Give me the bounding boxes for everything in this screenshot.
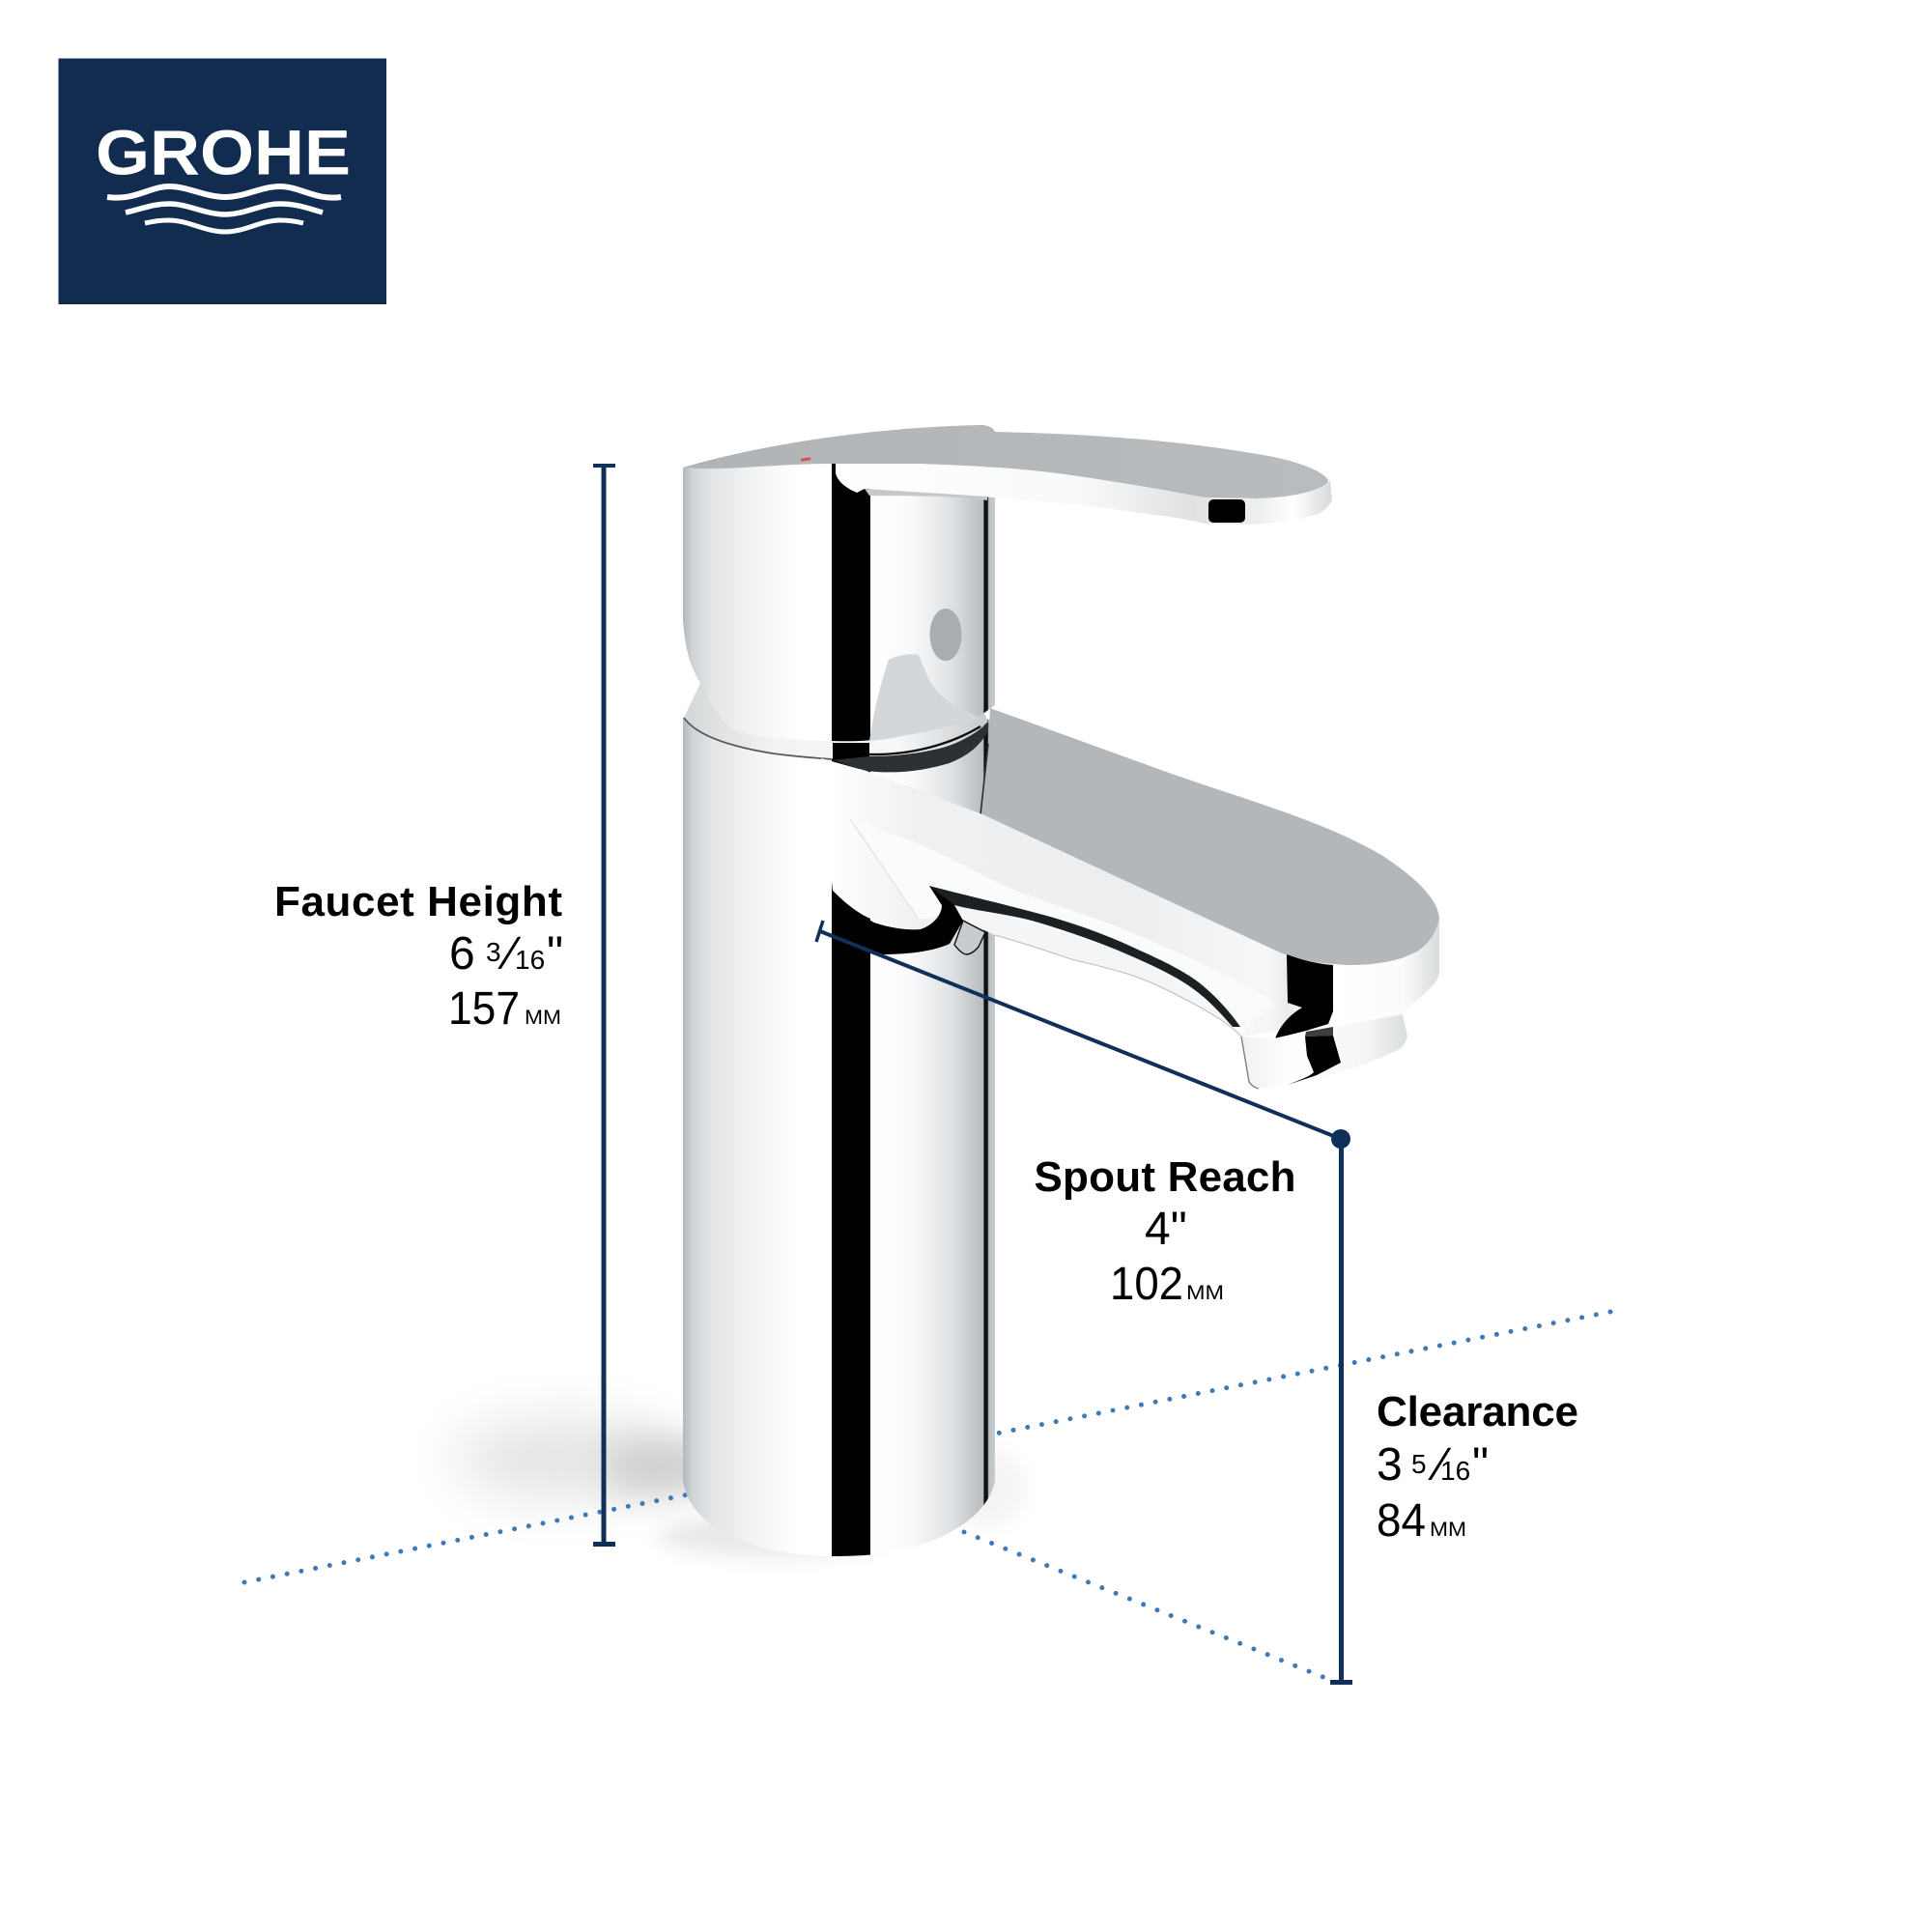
spout reach millimetres: MM [1186, 1282, 1224, 1304]
nozzle [1241, 1014, 1407, 1089]
clearance inches: ⁄ [1428, 1439, 1452, 1491]
clearance inches: 3 [1377, 1439, 1403, 1491]
dotted floor line: front [964, 1532, 1340, 1684]
floor shadow [454, 1416, 1024, 1557]
collar ring [684, 683, 988, 772]
dotted floor line: right [996, 1312, 1610, 1434]
logo: GROHE [58, 58, 386, 304]
faucet height inches: 16 [515, 945, 545, 975]
spout facet edge [850, 819, 918, 918]
logo wordmark: GROHE [96, 116, 351, 187]
dotted floor line: left [244, 1494, 689, 1582]
faucet height inches: 3 [486, 937, 501, 967]
handle hole [929, 609, 962, 661]
logo waves [107, 186, 341, 232]
spout body [820, 758, 1439, 1037]
label: faucet height: Faucet Height [274, 878, 562, 925]
faucet height inches: ⁄ [497, 928, 522, 980]
clearance inches: 16 [1440, 1456, 1470, 1486]
faucet neck [871, 731, 988, 817]
handle markers [801, 457, 810, 462]
clearance millimetres: 84 [1377, 1495, 1426, 1547]
faucet height millimetres: MM [525, 1007, 561, 1029]
base dark arc under spout [833, 886, 963, 954]
faucet base cylinder [683, 718, 995, 1556]
spout reach inches: 4" [1145, 1204, 1187, 1255]
spout top surface [980, 708, 1439, 965]
label: clearance [1377, 1388, 1578, 1547]
clearance inches: " [1472, 1439, 1489, 1491]
spout underside [954, 905, 1241, 1037]
clearance millimetres: MM [1430, 1519, 1466, 1541]
dimension: faucet height [593, 464, 615, 1547]
handle top surface [683, 425, 1328, 498]
handle body [683, 432, 995, 741]
dimension: spout reach [816, 921, 1350, 1149]
dimension: clearance [1330, 1139, 1352, 1685]
faucet height millimetres: 157 [448, 983, 520, 1035]
faucet height inches: 6 [449, 928, 475, 980]
label: spout reach [1034, 1153, 1296, 1310]
spout root detail [954, 921, 985, 954]
label: faucet height [274, 878, 563, 1035]
faucet [683, 425, 1439, 1556]
label: clearance: Clearance [1377, 1388, 1578, 1435]
spout dark reflection [929, 886, 1240, 1027]
neck edge line [980, 744, 988, 814]
faucet height inches: " [547, 928, 563, 980]
lever front face [836, 464, 1332, 525]
spout facet [850, 819, 1275, 1037]
handle reflection [869, 654, 979, 741]
spout underside edge [995, 935, 1241, 1037]
label: spout reach: Spout Reach [1034, 1153, 1296, 1201]
spout reach millimetres: 102 [1110, 1259, 1183, 1310]
spout right stripe [1275, 954, 1333, 1038]
lever dark reflection [1208, 499, 1245, 523]
under-lever shading [865, 489, 987, 500]
clearance inches: 5 [1411, 1449, 1427, 1479]
